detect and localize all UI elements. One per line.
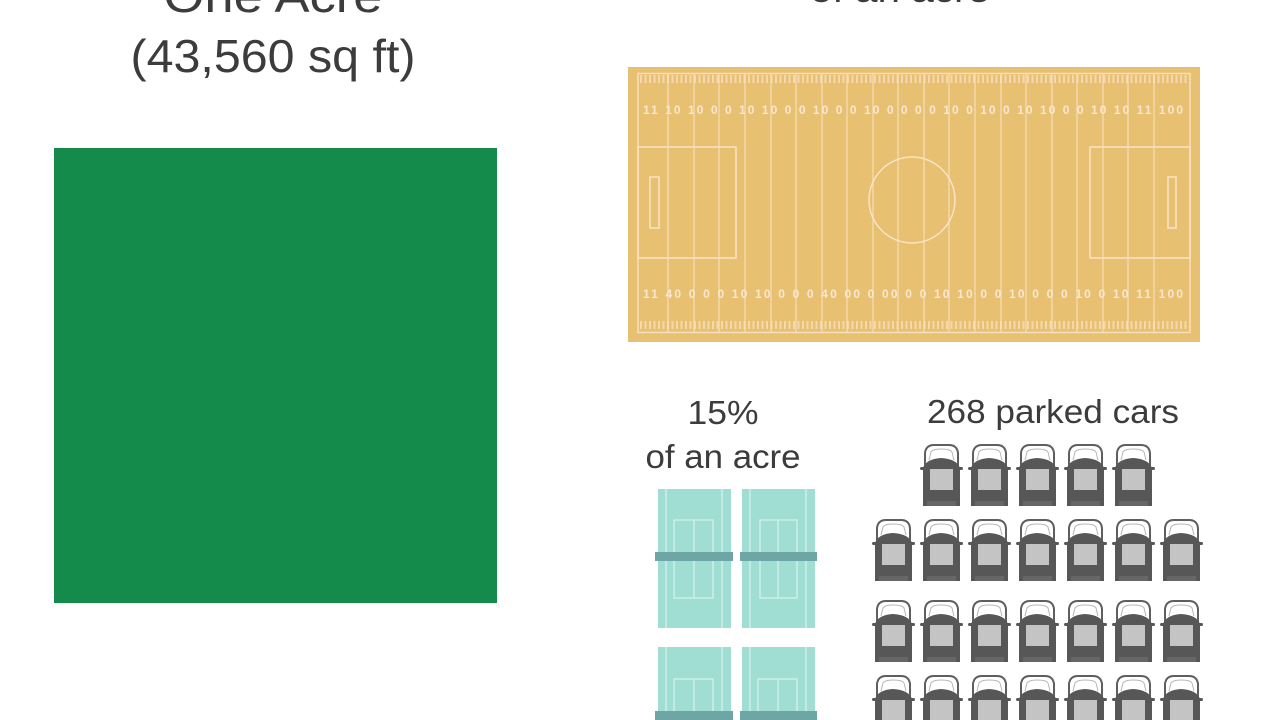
court 1 <box>655 489 733 628</box>
parked cars grid <box>872 445 1203 720</box>
heading: tennis courts share <box>646 394 800 475</box>
tennis courts <box>655 489 817 720</box>
heading: tennis courts share: of an acre <box>646 438 800 475</box>
heading: tennis courts share: 15% <box>688 394 758 431</box>
car row 2 <box>872 520 1203 581</box>
court 3 <box>655 647 733 720</box>
yard numbers, top: 11 10 10 0 0 10 10 0 0 10 0 0 10 0 0 0 0 10 0 10 0 10 10 0 0 10 10 11 100 <box>643 103 1183 117</box>
court 4 <box>740 647 817 720</box>
green one-acre square <box>54 148 497 603</box>
yard numbers, bottom: 11 40 0 0 0 10 10 0 0 0 40 00 0 00 0 0 10 10 0 0 10 0 0 0 10 0 10 11 100 <box>643 287 1183 301</box>
car row 1 <box>920 445 1155 506</box>
heading: parked cars: 268 parked cars <box>927 393 1179 430</box>
football field <box>628 67 1200 342</box>
car row 4 <box>872 676 1203 720</box>
court 2 <box>740 489 817 628</box>
car row 3 <box>872 601 1203 662</box>
heading: One Acre <box>130 0 416 82</box>
heading: One Acre: (43,560 sq ft) <box>130 30 416 82</box>
